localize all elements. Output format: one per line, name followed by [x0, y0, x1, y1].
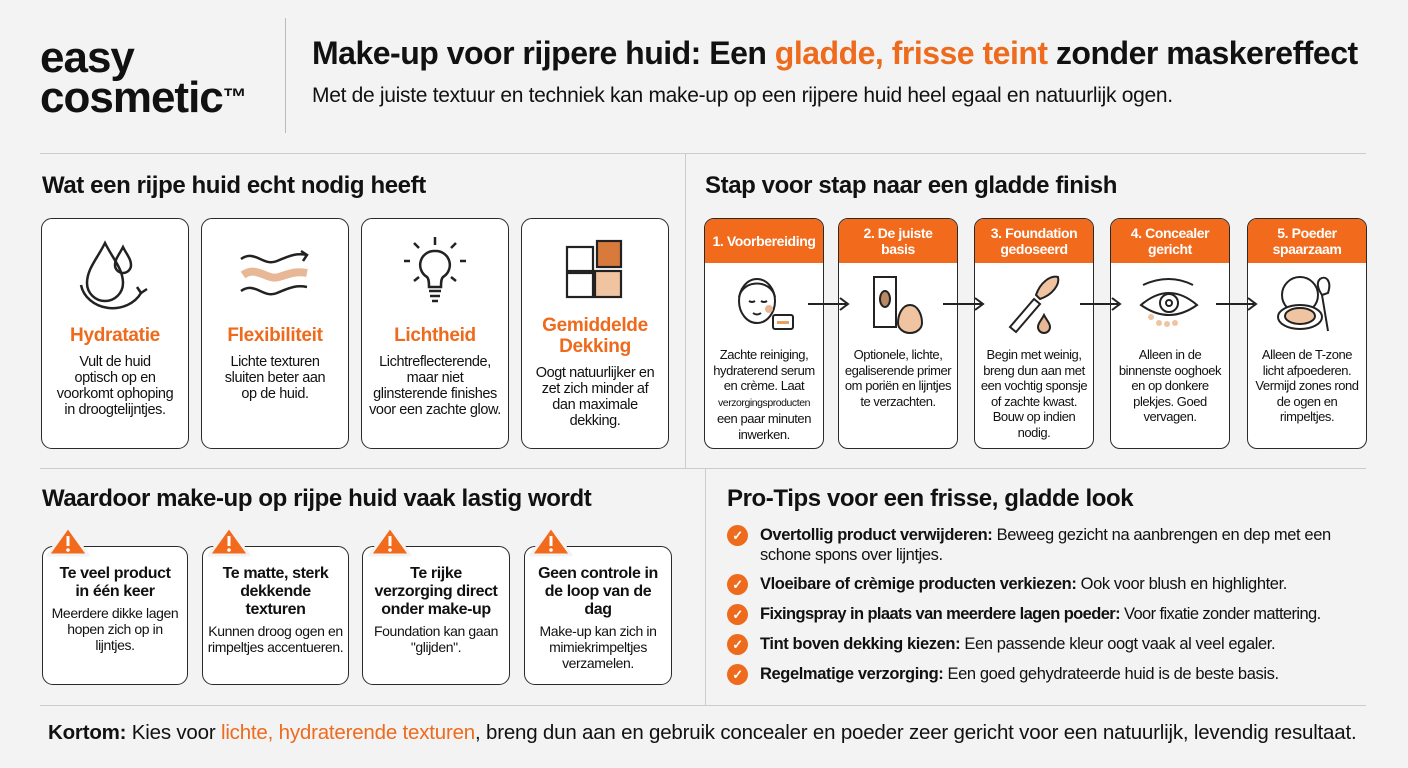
heading: problems: Waardoor make-up op rijpe huid vaak lastig wordt	[42, 485, 591, 512]
card: Flexibiliteit	[201, 218, 349, 449]
title: Make-up voor rijpere huid: Een gladde, frisse teint zonder maskereffect	[312, 35, 1358, 71]
text: Meerdere dikke lagen hopen zich op in lijntjes.	[52, 605, 178, 653]
step 3: Begin met weinig, breng dun aan met een vochtig sponsje of zachte kwast. Bouw op indien nodig.	[981, 347, 1087, 440]
step 2: Optionele, lichte, egaliserende primer om poriën en lijntjes te verzachten.	[845, 347, 951, 409]
conclusion: Kortom: Kies voor lichte, hydraterende texturen, breng dun aan en gebruik concealer en poeder zeer gericht voor een natuurlijk, levendig resultaat.	[48, 721, 1356, 744]
card: Dekking: Oogt natuurlijker en zet zich minder af dan maximale dekking.	[536, 365, 654, 429]
text: onder make-up	[381, 601, 491, 618]
icon: powder	[1277, 276, 1330, 332]
step 3: gedoseerd	[1000, 241, 1068, 257]
icon: bulb	[404, 237, 466, 302]
icon: tube	[873, 276, 923, 334]
card: Flexibiliteit: Flexibiliteit	[227, 325, 323, 346]
card: Lichtheid: Lichtreflecterende, maar niet glinsterende finishes voor een zachte glow.	[369, 354, 501, 418]
step 2: 2. De juiste	[863, 225, 933, 241]
text: Kunnen droog ogen en rimpeltjes accentueren.	[208, 623, 343, 655]
icons: warning triangles	[46, 530, 572, 556]
text: ✓	[732, 637, 743, 652]
text: Make-up kan zich in mimiekrimpeltjes verzamelen.	[540, 623, 656, 671]
step 4: gericht	[1148, 241, 1192, 257]
logo: easy	[40, 33, 134, 82]
step 2: basis	[881, 241, 915, 257]
icon: eye	[1140, 278, 1198, 327]
card: Hydratatie	[41, 218, 189, 449]
card: Dekking: Gemiddelde Dekking	[542, 315, 648, 357]
step 5: 5. Poeder	[1277, 225, 1337, 241]
arrows	[808, 297, 1258, 311]
icon: brush	[1008, 276, 1060, 334]
text: Overtollig product verwijderen: Beweeg gezicht na aanbrengen en dep met een schone spons over lijntjes.	[760, 526, 1331, 564]
step 3	[974, 218, 1094, 449]
text: ✓	[732, 607, 743, 622]
step 3: 3. Foundation	[991, 225, 1077, 241]
logo: cosmetic™	[40, 73, 246, 122]
text: Foundation kan gaan "glijden".	[374, 623, 498, 655]
text: Vloeibare of crèmige producten verkiezen: Ook voor blush en highlighter.	[760, 575, 1287, 593]
heading: steps: Stap voor stap naar een gladde finish	[705, 172, 1117, 199]
icon: puzzle	[566, 240, 622, 298]
step 4: Alleen in de binnenste ooghoek en op donkere plekjes. Goed vervagen.	[1119, 347, 1221, 424]
step 1	[704, 218, 824, 449]
subtitle: Met de juiste textuur en techniek kan make-up op een rijpere huid heel egaal en natuurlijk ogen.	[312, 84, 1173, 107]
text: ✓	[732, 577, 743, 592]
card: Flexibiliteit: Lichte texturen sluiten beter aan op de huid.	[225, 354, 325, 402]
heading: pro tips: Pro-Tips voor een frisse, gladde look	[727, 485, 1133, 512]
heading: needs: Wat een rijpe huid echt nodig heeft	[42, 172, 426, 199]
step 1: Zachte reiniging, hydraterend serum en crème. Laat verzorgingsproducten een paar minuten inwerken.	[713, 347, 815, 442]
icon: drops	[80, 240, 148, 310]
divider	[285, 18, 286, 133]
card: Dekking	[521, 218, 669, 449]
text: dag	[584, 601, 612, 618]
text: Geen controle in	[538, 565, 658, 582]
problem cards	[42, 546, 672, 685]
text: ✓	[732, 667, 743, 682]
step 4	[1110, 218, 1230, 449]
step 4: 4. Concealer	[1131, 225, 1209, 241]
text: verzorging direct	[374, 583, 498, 600]
card: Hydratatie: Hydratatie	[70, 325, 160, 346]
card: Hydratatie: Vult de huid optisch op en voorkomt ophoping in droogtelijntjes.	[57, 354, 173, 418]
logo	[40, 33, 246, 122]
text: de loop van de	[545, 583, 651, 600]
text: dekkende	[240, 583, 311, 600]
step 5: Alleen de T-zone licht afpoederen. Vermijd zones rond de ogen en rimpeltjes.	[1255, 347, 1359, 424]
icon: face	[738, 278, 794, 330]
text: ✓	[732, 528, 743, 543]
text: Fixingspray in plaats van meerdere lagen poeder: Voor fixatie zonder mattering.	[760, 605, 1321, 623]
text: in één keer	[75, 583, 155, 600]
tips list	[727, 525, 1331, 685]
step 5: spaarzaam	[1273, 241, 1341, 257]
text: Tint boven dekking kiezen: Een passende kleur oogt vaak al veel egaler.	[760, 635, 1275, 653]
text: Te rijke	[410, 565, 462, 582]
text: Te veel product	[59, 565, 171, 582]
text: texturen	[246, 601, 305, 618]
card: Lichtheid	[361, 218, 509, 449]
text: Regelmatige verzorging: Een goed gehydrateerde huid is de beste basis.	[760, 665, 1279, 683]
text: Te matte, sterk	[223, 565, 328, 582]
step 5	[1247, 218, 1367, 449]
card: Lichtheid: Lichtheid	[394, 325, 476, 346]
step 2	[838, 218, 958, 449]
icon: waves	[240, 250, 309, 296]
step 1: 1. Voorbereiding	[712, 233, 816, 249]
